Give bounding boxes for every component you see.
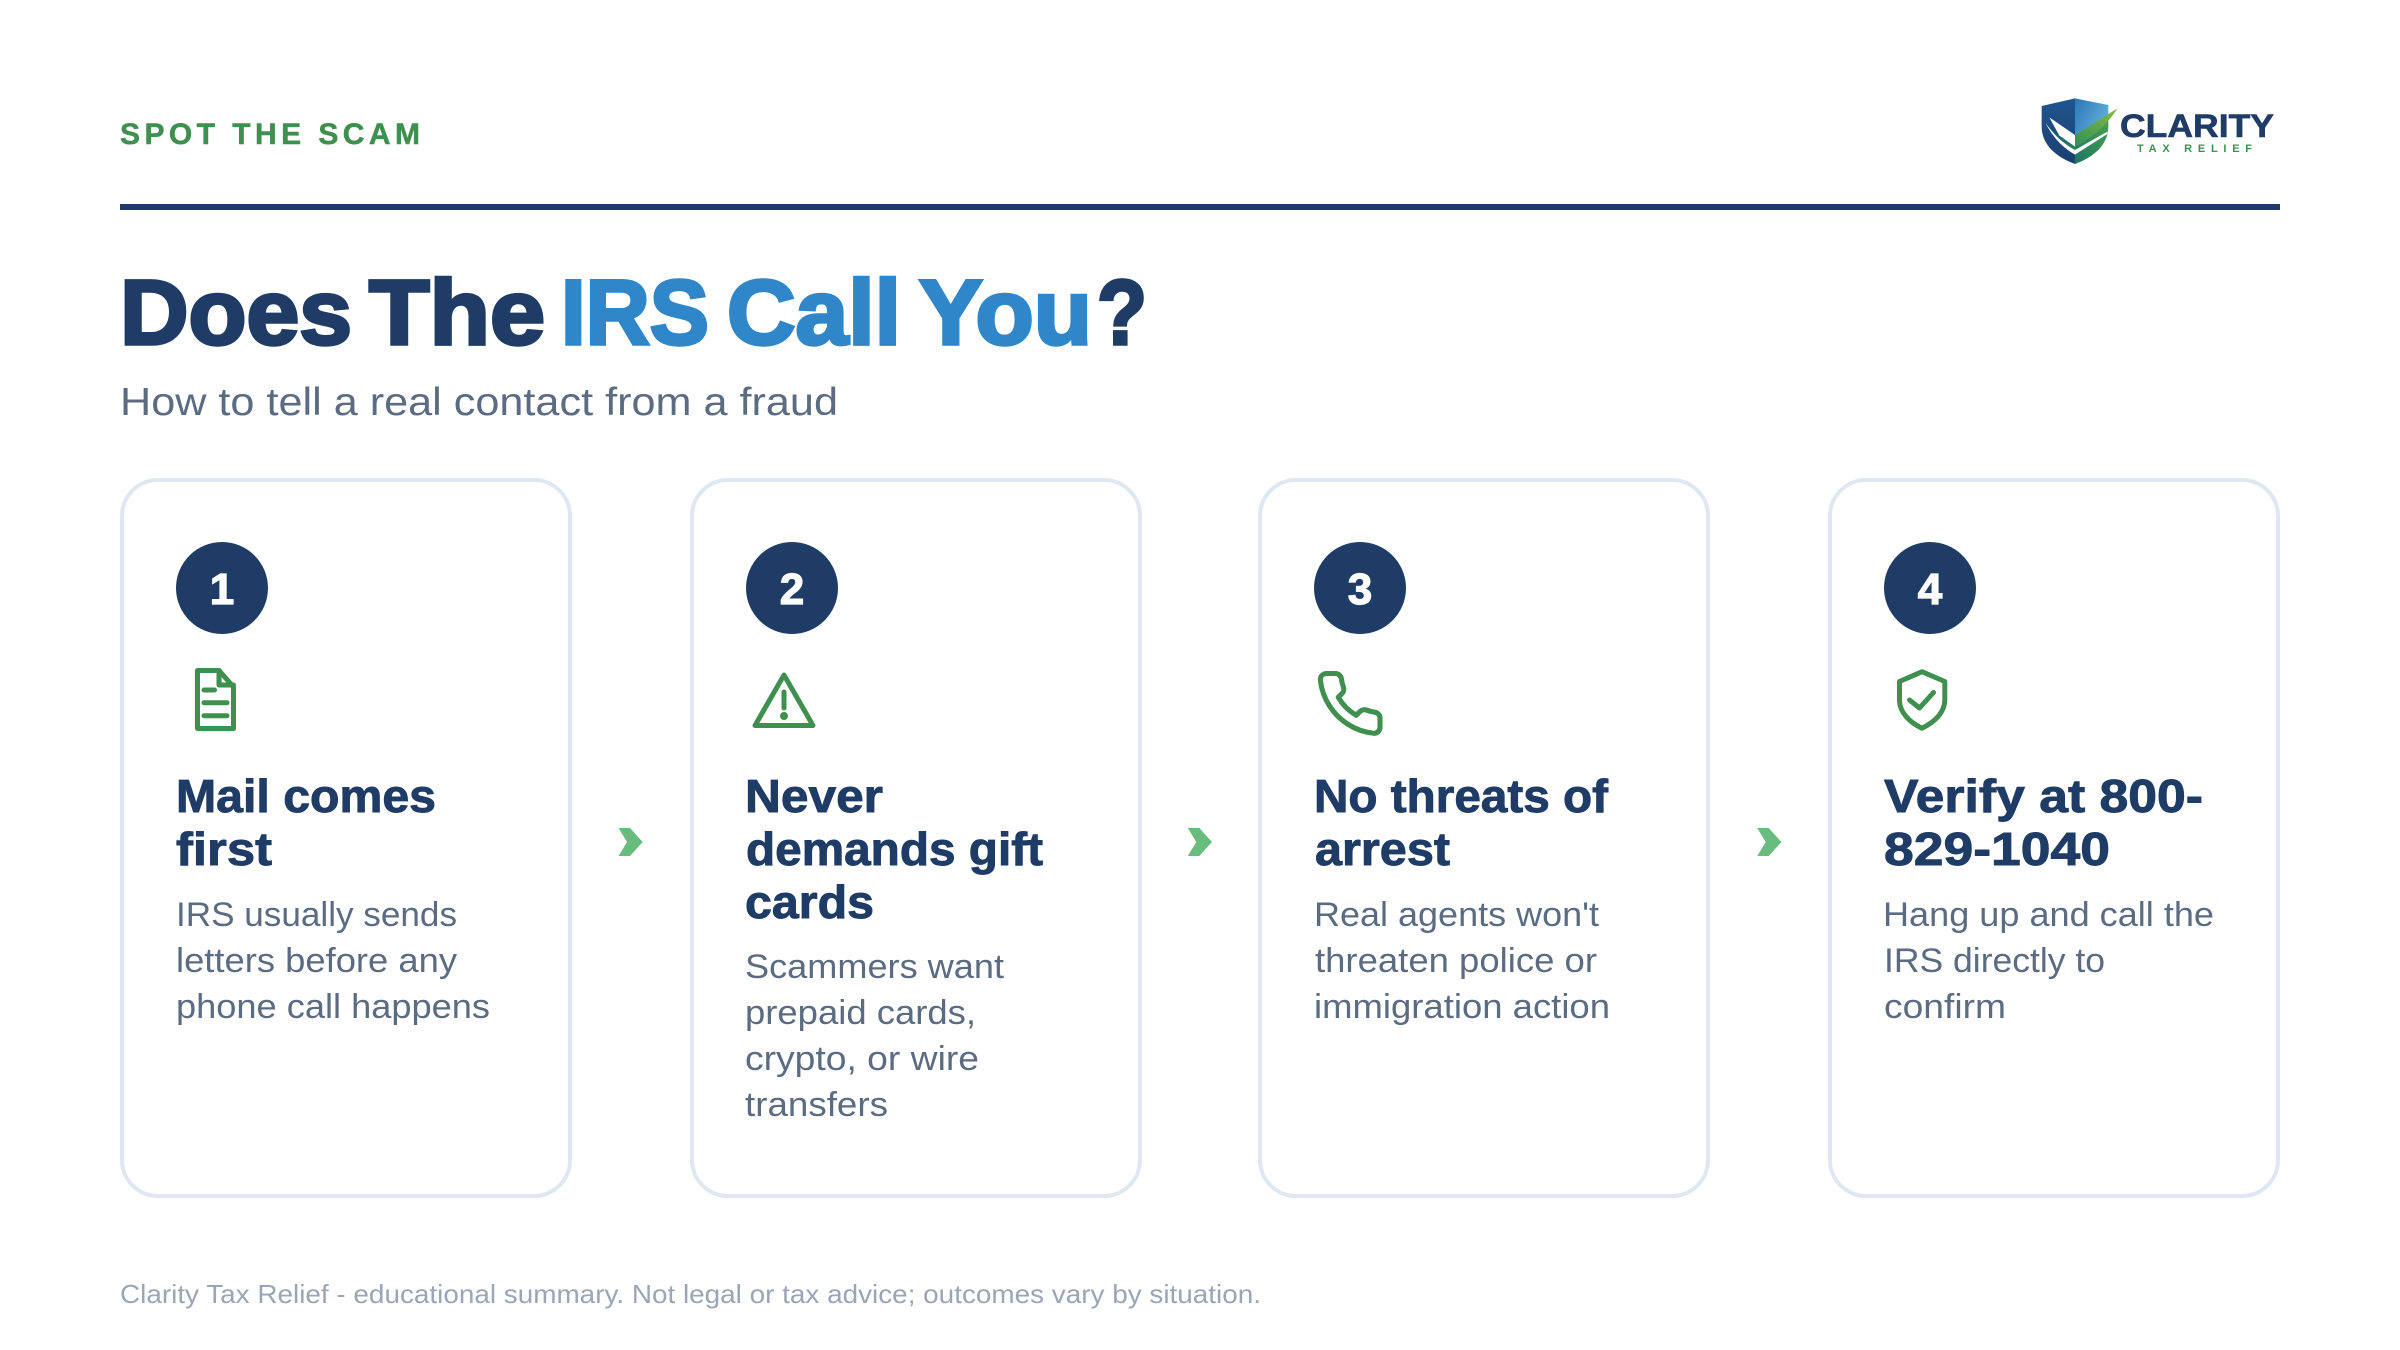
body text: [1883, 896, 2214, 1026]
arrow 1: [618, 828, 643, 856]
body text: threaten police or: [1315, 942, 1597, 980]
title: ?: [1097, 262, 1147, 364]
number badge 1: [176, 542, 268, 634]
title: Call: [727, 262, 901, 364]
arrow 2: [1188, 828, 1212, 856]
number badge 2: [746, 542, 838, 634]
panel: step 2: [692, 480, 1140, 1196]
body text: Hang up and call the: [1883, 896, 2214, 934]
icon: shield check: [1900, 672, 1945, 728]
footer disclaimer: Clarity Tax Relief - educational summary. Not legal or tax advice; outcomes vary by situation.: [120, 1279, 1261, 1309]
heading: cards: [745, 876, 874, 928]
icon: document: [198, 670, 234, 728]
logo shield icon: [2042, 98, 2117, 164]
body text: IRS directly to: [1884, 942, 2105, 980]
panel: step 1: [122, 480, 570, 1196]
heading: [1884, 770, 2203, 875]
body text: crypto, or wire: [745, 1040, 979, 1078]
card outline: [1830, 480, 2278, 1196]
number badge 1: 1: [210, 565, 234, 614]
header rule: [120, 204, 2280, 210]
number badge 4: 4: [1918, 565, 1943, 614]
heading: [176, 770, 436, 875]
eyebrow: SPOT THE SCAM: SPOT THE SCAM: [120, 118, 420, 151]
title: The: [369, 262, 545, 364]
heading: No threats of: [1314, 770, 1609, 822]
body text: Real agents won't: [1314, 896, 1600, 934]
logo tagline: TAX RELIEF: [2137, 143, 2252, 155]
body text: prepaid cards,: [745, 994, 976, 1032]
heading: [745, 770, 1043, 928]
title: IRS: [561, 262, 709, 364]
body text: IRS usually sends: [176, 896, 457, 934]
body text: phone call happens: [176, 988, 490, 1026]
heading: arrest: [1315, 823, 1450, 875]
card outline: [692, 480, 1140, 1196]
body text: transfers: [745, 1086, 888, 1124]
body text: [176, 896, 490, 1026]
panel: step 3: [1260, 480, 1708, 1196]
number badge 3: 3: [1348, 565, 1372, 614]
title: You: [919, 262, 1092, 364]
heading: first: [176, 823, 272, 875]
number badge 2: 2: [780, 565, 804, 614]
logo wordmark: CLARITY: [2120, 108, 2274, 144]
title: Does: [120, 262, 352, 364]
logo: Clarity Tax Relief: [2042, 98, 2274, 164]
body text: [745, 948, 1005, 1124]
body text: letters before any: [176, 942, 457, 980]
body text: confirm: [1884, 988, 2006, 1026]
number badge 4: [1884, 542, 1976, 634]
heading: Mail comes: [176, 770, 436, 822]
body text: [1314, 896, 1610, 1026]
heading: Never: [745, 770, 883, 822]
heading: [1314, 770, 1609, 875]
heading: 829-1040: [1884, 823, 2110, 875]
heading: Verify at 800-: [1884, 770, 2203, 822]
arrow 3: [1757, 828, 1781, 856]
body text: Scammers want: [745, 948, 1005, 986]
icon: phone: [1320, 673, 1380, 733]
heading: demands gift: [746, 823, 1043, 875]
number badge 3: [1314, 542, 1406, 634]
panel: step 4: [1830, 480, 2278, 1196]
body text: immigration action: [1314, 988, 1610, 1026]
card outline: [122, 480, 570, 1196]
icon: warning triangle: [755, 675, 813, 726]
subtitle: How to tell a real contact from a fraud: [120, 381, 838, 424]
title: [120, 262, 1147, 364]
card outline: [1260, 480, 1708, 1196]
